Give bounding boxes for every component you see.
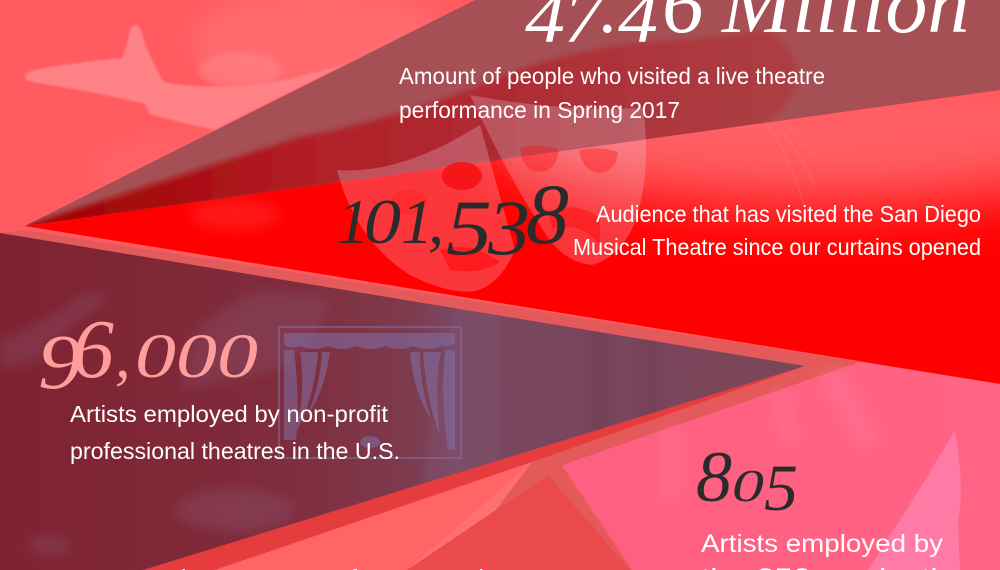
mask: back mask [337, 125, 515, 292]
number: 96,000: 9 [38, 318, 82, 405]
number: 101,538: 0 [364, 186, 401, 257]
number: 96,000: , [115, 323, 130, 391]
number: 101,538: 3 [487, 184, 530, 271]
photo: blurred audience hands [0, 290, 330, 555]
panel: dark maroon statistic panel [0, 233, 805, 570]
number: 805: 5 [764, 452, 798, 525]
description: performance in Spring 2017 [399, 97, 680, 123]
photo: light feather shape [868, 430, 961, 570]
number: 96,000: 6 [72, 303, 114, 396]
description: Musical Theatre since our curtains opened [573, 234, 981, 260]
panel: bright red wedge [26, 90, 1000, 384]
photo: outstretched hand and arm [25, 25, 345, 130]
number: 96,000: 0 [135, 323, 176, 391]
panel: grey-red upper wedge [25, 0, 1000, 230]
coral triangle below panel [215, 462, 630, 570]
statistic: 47.46 Million [399, 0, 969, 123]
statistic: 805 [696, 437, 991, 570]
photo: arm shadow band in the wedge [25, 30, 798, 230]
mask: front mask [470, 95, 646, 265]
icon: comedy and tragedy masks [337, 95, 646, 292]
number: 101,538: 5 [446, 184, 492, 271]
number: 805: 8 [696, 437, 732, 517]
number: 96,000: 0 [217, 323, 258, 391]
description: Artists employed by non-profit [70, 401, 389, 427]
band around lower panel [0, 230, 1000, 570]
number: 101,538: 8 [526, 166, 569, 262]
number: 101,538: 1 [401, 186, 433, 257]
panel: pink statistic panel [563, 362, 1000, 570]
description: Artists employed by [701, 530, 944, 558]
photo: pale streaks in pink panel [660, 368, 880, 505]
statistic: 96,000 [38, 303, 400, 464]
description: Amount of people who visited a live theatre [399, 63, 825, 89]
description: Audience that has visited the San Diego [596, 201, 981, 227]
number: 101,538: , [428, 186, 444, 257]
description: professional theatres in the U.S. [70, 438, 400, 464]
statistic: 101,538 [337, 166, 981, 271]
number: 101,538: 1 [337, 186, 369, 257]
number: 96,000: 0 [176, 323, 217, 391]
icon: curtain stage [279, 327, 461, 458]
number: 805: 0 [732, 460, 764, 511]
photo: blonde hair strands [766, 120, 818, 210]
